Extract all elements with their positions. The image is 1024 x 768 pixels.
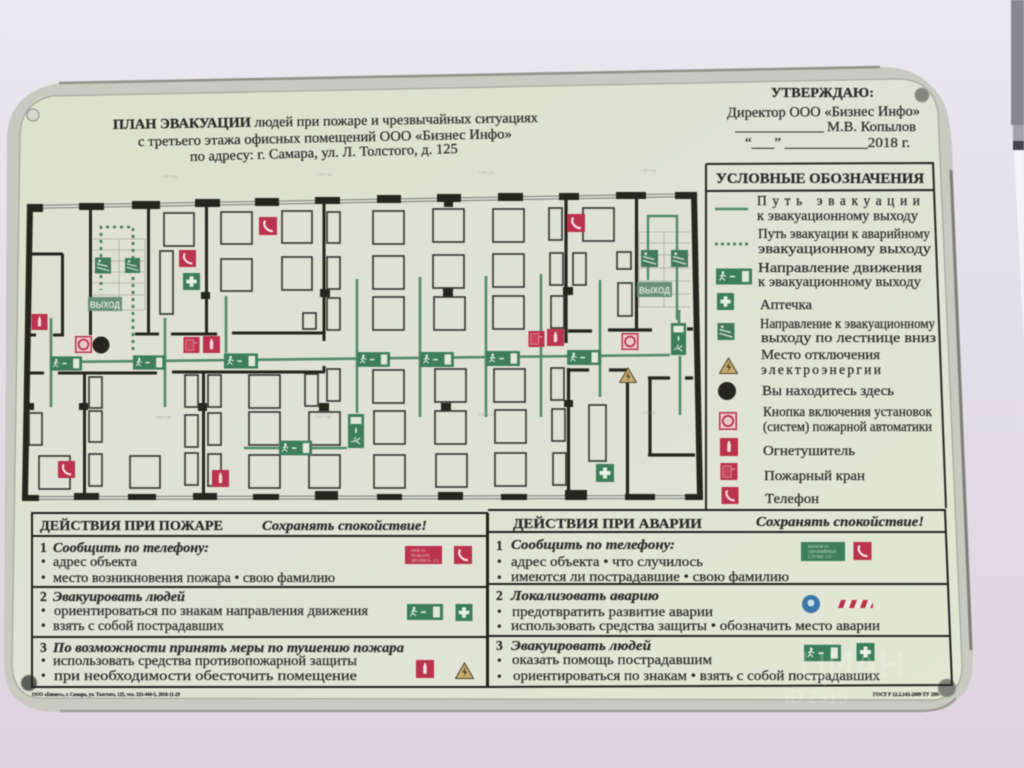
- emergency exit dotted path: [101, 227, 133, 350]
- fire step 1: [40, 540, 472, 585]
- accident step 1: •: [497, 570, 502, 585]
- floor plan: [22, 168, 703, 501]
- icon: warning barrier tape: [838, 600, 873, 608]
- signs: exit direction: [50, 323, 686, 455]
- fire step 2: [40, 589, 472, 633]
- fire step 1: 1: [40, 540, 47, 555]
- room dimension labels: 1.90*1.00: [315, 414, 331, 419]
- accident step 2: 2: [496, 588, 503, 603]
- evacuation plan board: [4, 67, 973, 712]
- accident step 2: •: [497, 604, 502, 619]
- desks: [29, 208, 632, 489]
- window lines: [27, 195, 700, 498]
- accident step 3: ориентироваться по знакам • взять с собой пострадавших: [513, 668, 880, 683]
- accident step 3: оказать помощь пострадавшим: [512, 652, 713, 667]
- accident step 3: 3: [496, 638, 503, 653]
- fire step 3: По возможности принять меры по тушению пожара: [52, 640, 404, 655]
- icon: extinguisher: [416, 660, 434, 678]
- fire step 2: •: [41, 603, 46, 618]
- fire step 3: [40, 640, 474, 683]
- title: ПЛАН ЭВАКУАЦИИ людей при пожаре и чрезвычайных ситуациях: [113, 111, 538, 133]
- accident step 1: [496, 537, 872, 585]
- legend item: stairs: Направление к эвакуационному: [760, 316, 935, 331]
- footer small print right: ГОСТ Р 12.2.143-2009 ТУ 299-: [873, 693, 940, 698]
- icon: exit sign: [407, 604, 443, 620]
- fire step 1: место возникновения пожара • свою фамилию: [53, 570, 335, 585]
- photo watermark: ЦИАН: [800, 645, 905, 687]
- room dimension labels: 1.90*1.00: [316, 172, 332, 177]
- panel: legend: [706, 163, 946, 510]
- legend item: evacuation path: Путь эвакуации: [757, 193, 920, 208]
- legend item: extinguisher: Огнетушитель: [763, 443, 855, 458]
- legend item: alarm button: Кнопка включения установок: [763, 404, 932, 419]
- fire call sign: [405, 546, 442, 564]
- screw bottom right: [938, 679, 956, 697]
- legend item: you are here: Вы находитесь здесь: [762, 383, 894, 398]
- legend item: telephone: Телефон: [765, 491, 819, 506]
- icon: exit sign: [804, 645, 841, 661]
- legend item: hydrant: Пожарный кран: [764, 468, 865, 483]
- accident step 2: предотвратить развитие аварии: [512, 604, 713, 619]
- legend item: power cut-off: [720, 347, 881, 377]
- title: [113, 111, 538, 165]
- legend item: alarm button: [719, 404, 932, 434]
- icon: protective equipment: [802, 595, 820, 613]
- fire step 1: Сообщить по телефону:: [53, 540, 209, 555]
- legend item: emergency path: эвакуационному выходу: [758, 241, 931, 256]
- approval block: “___” ___________2018 г.: [745, 136, 910, 151]
- accident call sign: [801, 542, 845, 561]
- approval block: Директор ООО «Бизнес Инфо»: [727, 104, 920, 121]
- fire step 2: взять с собой пострадавших: [53, 618, 224, 633]
- legend item: stairs: выходу по лестнице вниз: [761, 330, 936, 345]
- accident step 1: адрес объекта • что случилось: [511, 554, 703, 569]
- stair grids: [93, 232, 690, 310]
- icon: you are here: [92, 336, 110, 354]
- fire heading: ДЕЙСТВИЯ ПРИ ПОЖАРЕ: [40, 517, 223, 534]
- panel: fire actions: [32, 513, 487, 687]
- icon: telephone: [854, 542, 872, 560]
- legend item: first aid: Аптечка: [760, 297, 812, 312]
- accident step 1: имеются ли пострадавшие • свою фамилию: [511, 569, 789, 584]
- photo watermark: [785, 645, 905, 707]
- photo watermark: ID 2919: [785, 687, 848, 707]
- fire heading: [40, 517, 427, 534]
- approval block: [727, 86, 920, 151]
- fire call sign: ЗВОНИТЬ 112: [411, 558, 439, 563]
- sign: exit right: ВЫХОД: [639, 286, 671, 296]
- fire step 3: 3: [40, 640, 47, 655]
- accident step 3: Эвакуировать людей: [511, 638, 652, 653]
- legend item: you are here: [718, 382, 894, 400]
- room dimension labels: 1.90*1.00: [161, 174, 177, 179]
- accident step 3: •: [497, 653, 502, 668]
- accident step 3: [496, 638, 880, 684]
- room dimension labels: 1.90*1.00: [478, 170, 494, 175]
- legend item: power cut-off: электроэнергии: [761, 362, 881, 377]
- fire step 3: •: [41, 668, 46, 683]
- legend item: telephone: [722, 487, 819, 506]
- walls and pillars: [22, 192, 703, 501]
- icon: power cut-off: [456, 663, 474, 678]
- legend heading: УСЛОВНЫЕ ОБОЗНАЧЕНИЯ: [716, 171, 924, 187]
- fire step 1: •: [41, 570, 46, 585]
- fire step 3: при необходимости обесточить помещение: [54, 668, 357, 683]
- legend item: extinguisher: [720, 438, 855, 458]
- accident step 2: использовать средства защиты • обозначить место аварии: [511, 618, 880, 633]
- fire step 2: ориентироваться по знакам направления движения: [54, 603, 368, 618]
- approval block: УТВЕРЖДАЮ:: [771, 86, 874, 101]
- screw bottom left: [21, 675, 37, 691]
- legend item: direction sign: Направление движения: [758, 260, 922, 275]
- accident step 2: •: [497, 619, 502, 634]
- icons: alarm buttons: [75, 333, 638, 353]
- panel: accident actions: [488, 510, 952, 687]
- icons: extinguishers: [32, 314, 564, 487]
- legend item: evacuation path: [715, 193, 920, 223]
- fire heading: Сохранять спокойствие!: [262, 518, 427, 533]
- icons: telephones: [58, 214, 585, 478]
- room dimension labels: [155, 168, 656, 420]
- accident heading: [513, 514, 924, 532]
- signs: stairs: [95, 250, 688, 274]
- accident call sign: СЛУЖБ 112: [808, 554, 831, 559]
- icons: fire hydrants: [184, 331, 544, 353]
- legend item: evacuation path: к эвакуационному выходу: [757, 208, 918, 223]
- legend item: hydrant: [720, 463, 865, 483]
- legend item: direction sign: [716, 260, 922, 289]
- room dimension labels: 1.60*1.40: [640, 410, 656, 415]
- room dimension labels: 1.90*1.00: [155, 415, 171, 420]
- sign: exit left: ВЫХОД: [90, 300, 121, 310]
- footer small print left: ООО «Бизнес», г. Самара, ул. Толстого, 125, тел. 333-444-5, 2018-11-29: [32, 693, 180, 698]
- fire step 2: •: [41, 618, 46, 633]
- sign: exit right: [637, 282, 672, 297]
- icon: first aid: [856, 643, 874, 661]
- legend item: alarm button: (систем) пожарной автоматики: [763, 419, 932, 434]
- accident step 1: 1: [496, 538, 503, 553]
- fire step 3: использовать средства противопожарной защиты: [53, 653, 357, 668]
- legend item: emergency path: [715, 226, 931, 256]
- approval block: М.В. Копылов: [827, 120, 916, 135]
- icon: telephone: [454, 546, 472, 564]
- sign: exit left: [88, 297, 122, 311]
- legend item: first aid: [717, 293, 812, 312]
- accident heading: Сохранять спокойствие!: [756, 514, 924, 529]
- title: с третьего этажа офисных помещений ООО «Бизнес Инфо»: [138, 127, 512, 150]
- fire step 3: •: [41, 653, 46, 668]
- accident step 1: •: [497, 554, 502, 569]
- evacuation paths: [51, 216, 680, 448]
- screw top right: [914, 88, 930, 102]
- icons: first aid: [183, 273, 614, 482]
- fire step 1: •: [41, 554, 46, 569]
- legend item: direction sign: к эвакуационному выходу: [758, 274, 921, 289]
- accident step 2: Локализовать аварию: [510, 588, 659, 603]
- legend item: stairs: [718, 316, 936, 345]
- accident step 3: •: [497, 669, 502, 684]
- background edge at right of the photo: [1011, 0, 1024, 345]
- accident step 2: [496, 588, 880, 634]
- icon: power cut-off: [620, 368, 636, 383]
- accident call sign: АВАРИЙНЫХ: [808, 549, 837, 554]
- fire call sign: ПРИ 01: [411, 548, 426, 553]
- fire step 2: Эвакуировать людей: [53, 589, 186, 604]
- room dimension labels: 1.90*1.00: [640, 168, 656, 173]
- fire call sign: ПОЖАРЕ: [411, 553, 430, 558]
- screw top left: [27, 109, 39, 121]
- legend item: power cut-off: Место отключения: [761, 347, 880, 362]
- icon: first aid: [456, 604, 472, 621]
- room dimension labels: 1.60*1.40: [478, 412, 494, 417]
- fire step 2: 2: [40, 589, 47, 604]
- legend item: emergency path: Путь эвакуации к аварийному: [758, 226, 930, 241]
- title: по адресу: г. Самара, ул. Л. Толстого, д. 125: [190, 142, 458, 165]
- accident call sign: ВЫЗОВ 01: [808, 544, 829, 549]
- accident heading: ДЕЙСТВИЯ ПРИ АВАРИИ: [513, 515, 702, 532]
- fire step 1: адрес объекта: [53, 554, 137, 569]
- accident step 1: Сообщить по телефону:: [511, 537, 675, 552]
